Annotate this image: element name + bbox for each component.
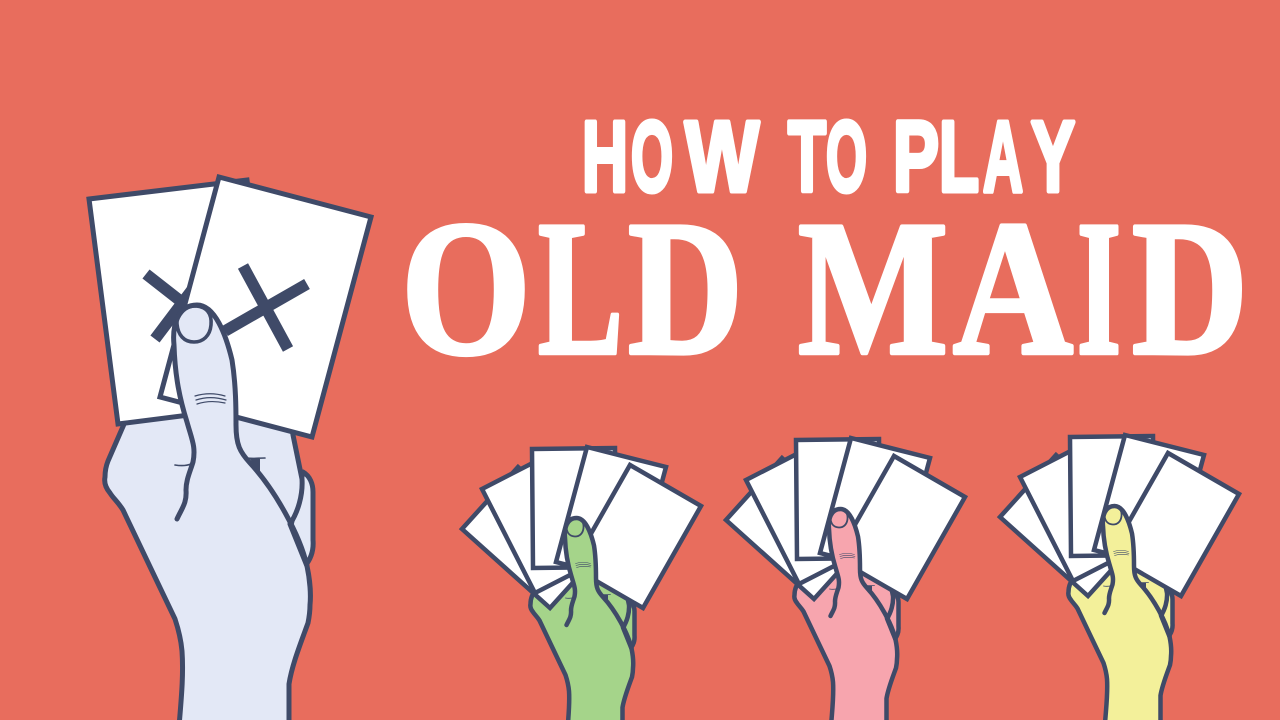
pink hand holding five cards (726, 438, 965, 720)
heading: old maid: M (798, 181, 948, 395)
heading: how to play: H (582, 101, 628, 213)
card: right (160, 177, 371, 437)
heading: how to play: Y (1031, 101, 1075, 213)
heading: how to play: L (939, 101, 979, 213)
fan of cards (1000, 435, 1239, 596)
hand: palm (794, 564, 899, 720)
heading: old maid: I (1077, 181, 1121, 395)
card: left (89, 180, 276, 424)
heading: old maid: D (628, 181, 743, 395)
hand: thumb (565, 518, 632, 648)
hand: thumb (1103, 506, 1170, 636)
heading: how to play: W (685, 101, 759, 213)
hand: thumb (829, 509, 896, 640)
heading: old maid: O (401, 181, 531, 395)
heading: old maid: D (1132, 181, 1248, 395)
heading: how to play: O (631, 101, 673, 213)
heading: how to play: O (826, 101, 867, 213)
fan of cards (462, 447, 701, 608)
heading: how to play: T (788, 101, 826, 213)
heading: how to play: P (893, 101, 939, 213)
large blue hand holding two cards (89, 177, 371, 720)
title (401, 101, 1248, 395)
hand: palm (530, 573, 635, 720)
green hand holding five cards (462, 447, 701, 720)
heading: old maid: L (538, 181, 623, 395)
icon: right x mark (225, 266, 307, 349)
hand: thumb (174, 305, 307, 566)
hand: palm (105, 415, 313, 720)
heading: how to play: A (983, 101, 1023, 213)
yellow hand holding five cards (1000, 435, 1239, 720)
hand: palm (1068, 561, 1173, 720)
fan of cards (726, 438, 965, 599)
icon: left x mark (146, 274, 192, 339)
heading: old maid: A (953, 181, 1073, 395)
